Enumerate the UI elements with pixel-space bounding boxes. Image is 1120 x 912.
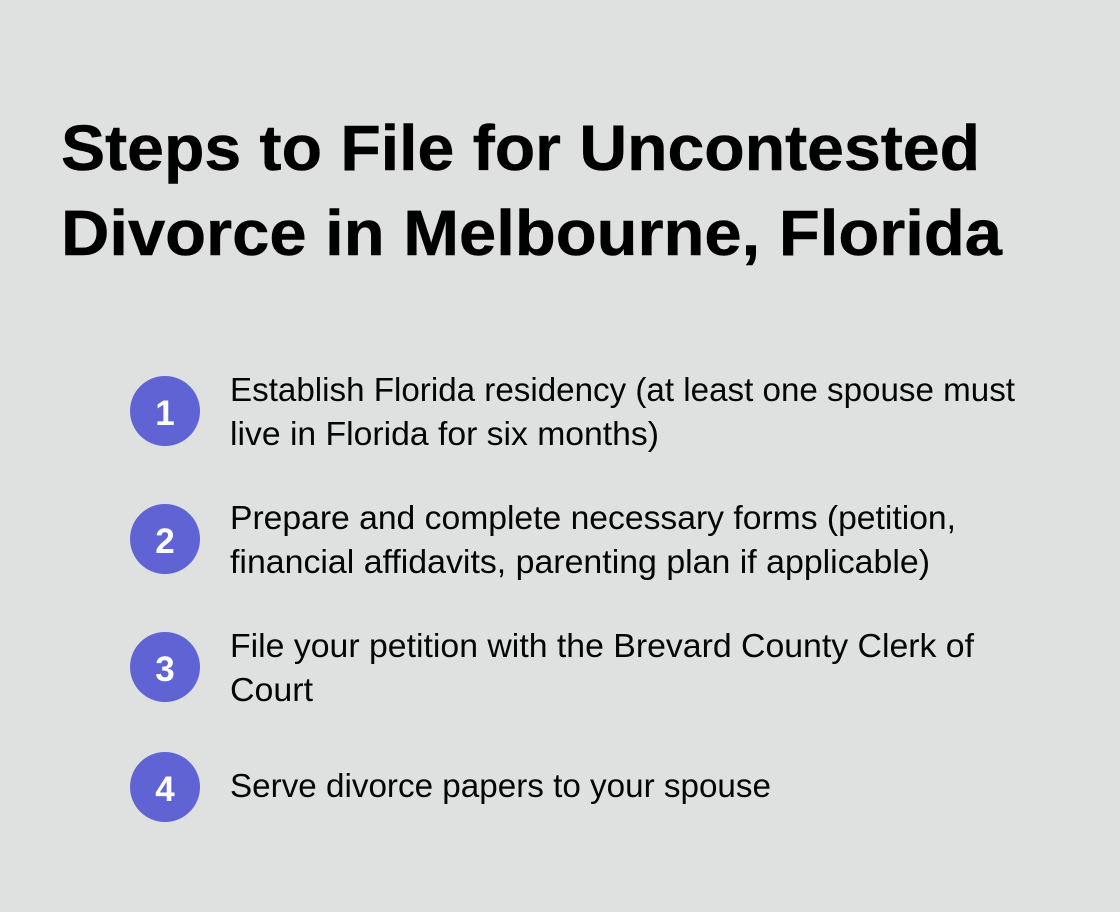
step 1 number badge: 1 — [155, 394, 175, 433]
step 3 — [130, 627, 975, 708]
step 4 — [130, 752, 771, 822]
title: Divorce in Melbourne, Florida — [61, 197, 1002, 269]
step 1 — [130, 371, 1015, 452]
step 1 text — [230, 371, 1015, 452]
step 3 text: File your petition with the Brevard County Clerk of — [230, 627, 975, 664]
step 2 text — [230, 499, 956, 580]
step 2 text: Prepare and complete necessary forms (petition, — [230, 499, 956, 536]
step 4 number badge: 4 — [155, 770, 175, 809]
step 1 text: live in Florida for six months) — [230, 415, 659, 452]
step 2 number badge — [130, 504, 200, 574]
title — [61, 112, 1002, 269]
title: Steps to File for Uncontested — [61, 112, 980, 184]
step 3 text: Court — [230, 671, 313, 708]
step 4 number badge — [130, 752, 200, 822]
step 3 number badge: 3 — [155, 650, 175, 689]
step 1 text: Establish Florida residency (at least one spouse must — [230, 371, 1015, 408]
step 4 text: Serve divorce papers to your spouse — [230, 767, 771, 804]
step 2 text: financial affidavits, parenting plan if applicable) — [230, 543, 930, 580]
step 2 number badge: 2 — [155, 522, 175, 561]
step 2 — [130, 499, 956, 580]
step 3 text — [230, 627, 975, 708]
step 3 number badge — [130, 632, 200, 702]
step 1 number badge — [130, 376, 200, 446]
